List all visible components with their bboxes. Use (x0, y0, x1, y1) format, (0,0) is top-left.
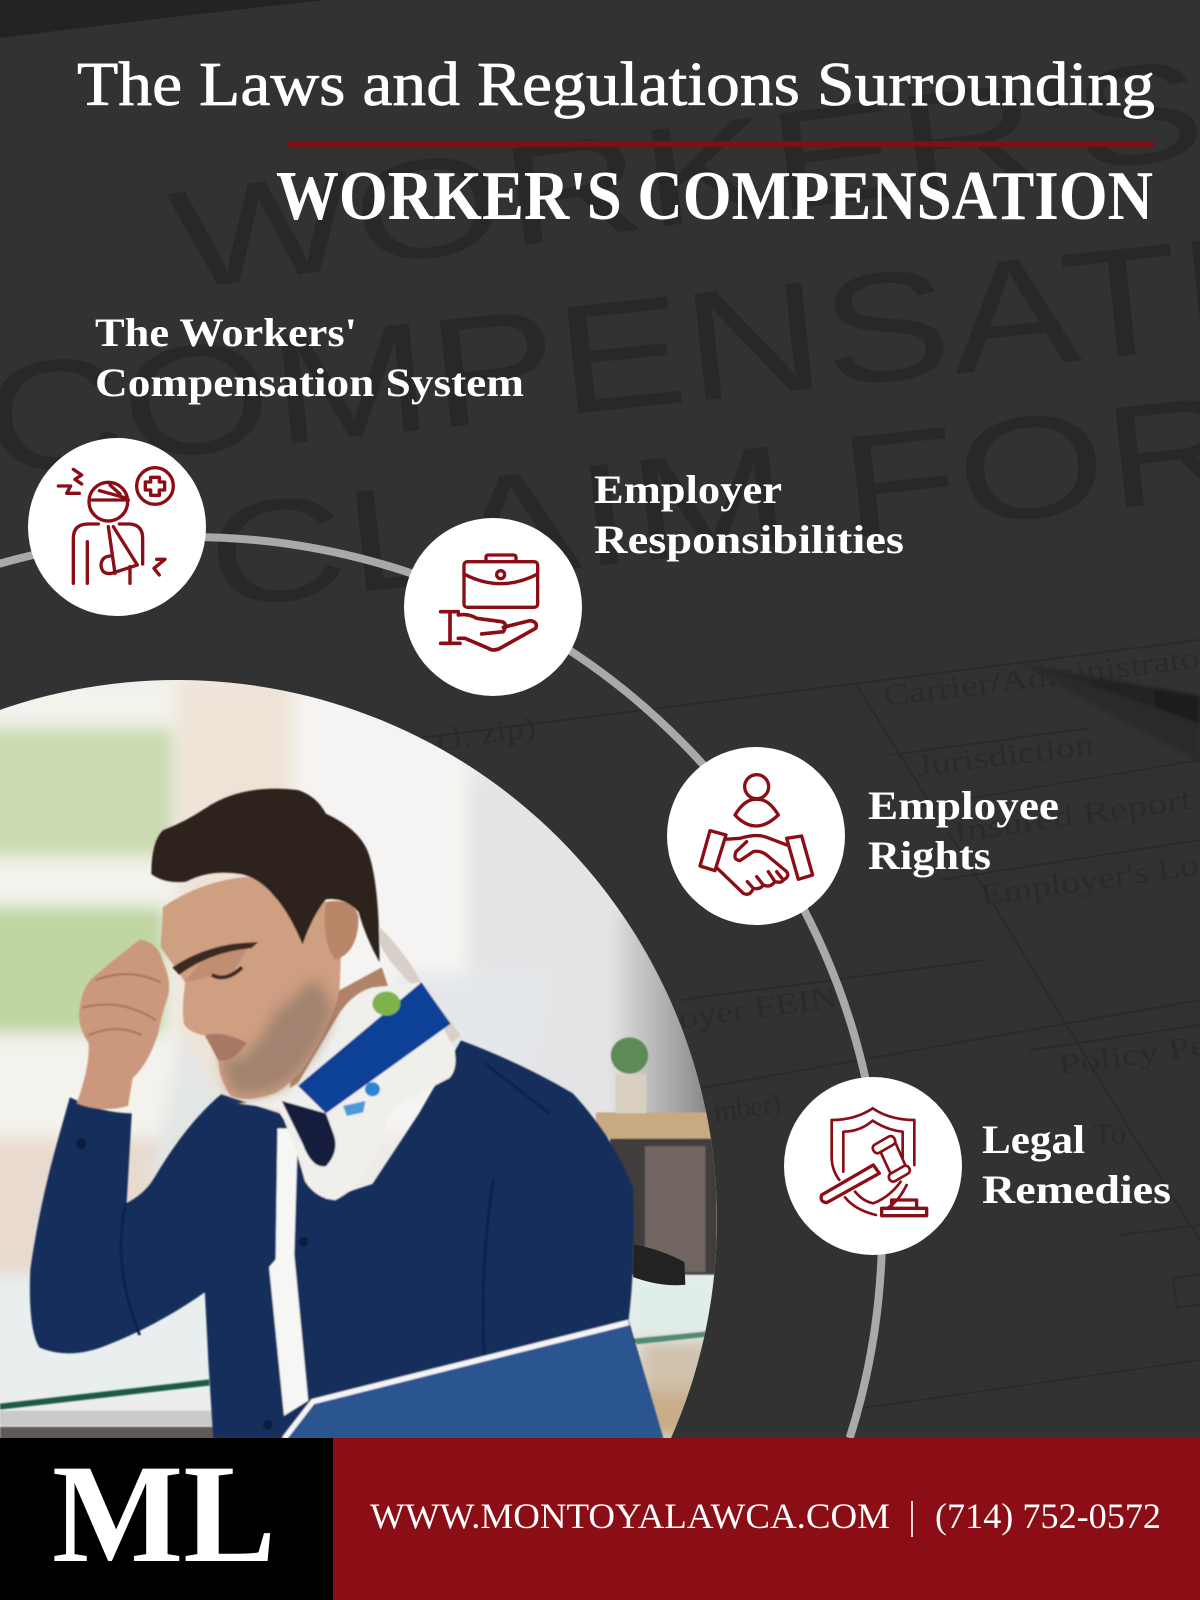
face (161, 877, 342, 1099)
step 1 label: Compensation System (95, 360, 524, 405)
watermark: form grid and labels: Jurisdiction (915, 729, 1096, 783)
step 4 label (982, 1117, 1171, 1212)
ear (325, 901, 359, 960)
footer: contact panel: (714) 752-0572 (935, 1496, 1161, 1536)
watermark: claim form heading: WORKER'S (161, 28, 1200, 320)
step 3 label (868, 783, 1059, 878)
connecting arc (0, 537, 882, 1438)
photo: injured worker in neck brace and sling (0, 650, 736, 1456)
desk and shelf detail (0, 1037, 717, 1442)
hair (151, 789, 379, 962)
title rule (288, 141, 1153, 147)
watermark: form grid and labels: Carrier/Administrator (882, 640, 1200, 713)
brace (237, 982, 456, 1200)
step 4 marker: shield and gavel icon (784, 1077, 962, 1255)
step 1 marker: injured worker icon (28, 438, 206, 616)
pen (1020, 664, 1200, 762)
watermark: claim form heading: COMPENSATI (0, 205, 1200, 508)
neck (289, 967, 400, 1113)
eye and brow (172, 942, 258, 975)
watermark: claim form heading (0, 28, 1200, 639)
shirt seams (121, 1063, 549, 1355)
watermark: form grid and labels (420, 640, 1200, 1410)
watermark: claim form heading: CLAIM FOR (200, 364, 1200, 639)
buttons (263, 1420, 272, 1430)
step 2 label: Responsibilities (594, 517, 904, 562)
step 3 label: Employee (868, 783, 1059, 828)
brace blue strap and dials (298, 982, 451, 1113)
step 2 label (594, 467, 904, 562)
step 2 label: Employer (594, 467, 782, 512)
top-left dark corner (0, 0, 325, 38)
strap (269, 1129, 308, 1416)
shirt (30, 1040, 663, 1439)
watermark: form grid and labels: Insured Report (951, 783, 1195, 849)
step 1 label (95, 310, 524, 405)
watermark: form grid and labels: To (1093, 1117, 1127, 1152)
hand (77, 940, 169, 1109)
brace back strap (379, 927, 461, 1043)
footer: logo panel: ML (52, 1436, 276, 1592)
lips (205, 1034, 247, 1061)
step 3 label: Rights (868, 833, 991, 878)
stubble (221, 977, 333, 1095)
footer: contact panel: WWW.MONTOYALAWCA.COM (370, 1496, 890, 1536)
step 4 label: Remedies (982, 1167, 1171, 1212)
sling (286, 1324, 663, 1439)
footer: logo panel (0, 1436, 333, 1600)
watermark: form grid and labels: Employer's Lo (978, 849, 1200, 912)
footer: contact panel (333, 1438, 1200, 1600)
watermark: form grid and labels: cl. zip) (434, 710, 538, 757)
watermark: form grid and labels: loyer FEIN (666, 981, 839, 1037)
title: The Laws and Regulations Surrounding (77, 51, 1155, 119)
photo background (0, 650, 736, 1456)
watermark: form grid and labels: mber) (711, 1087, 783, 1129)
wheelchair handle (633, 1244, 685, 1285)
watermark: form grid and labels: Policy Pe (1056, 1028, 1200, 1082)
step 2 marker: briefcase in hand icon (404, 518, 582, 696)
step 3 marker: handshake icon (667, 747, 845, 925)
step 1 label: The Workers' (95, 310, 357, 355)
man (30, 789, 663, 1439)
step 4 label: Legal (982, 1117, 1085, 1162)
